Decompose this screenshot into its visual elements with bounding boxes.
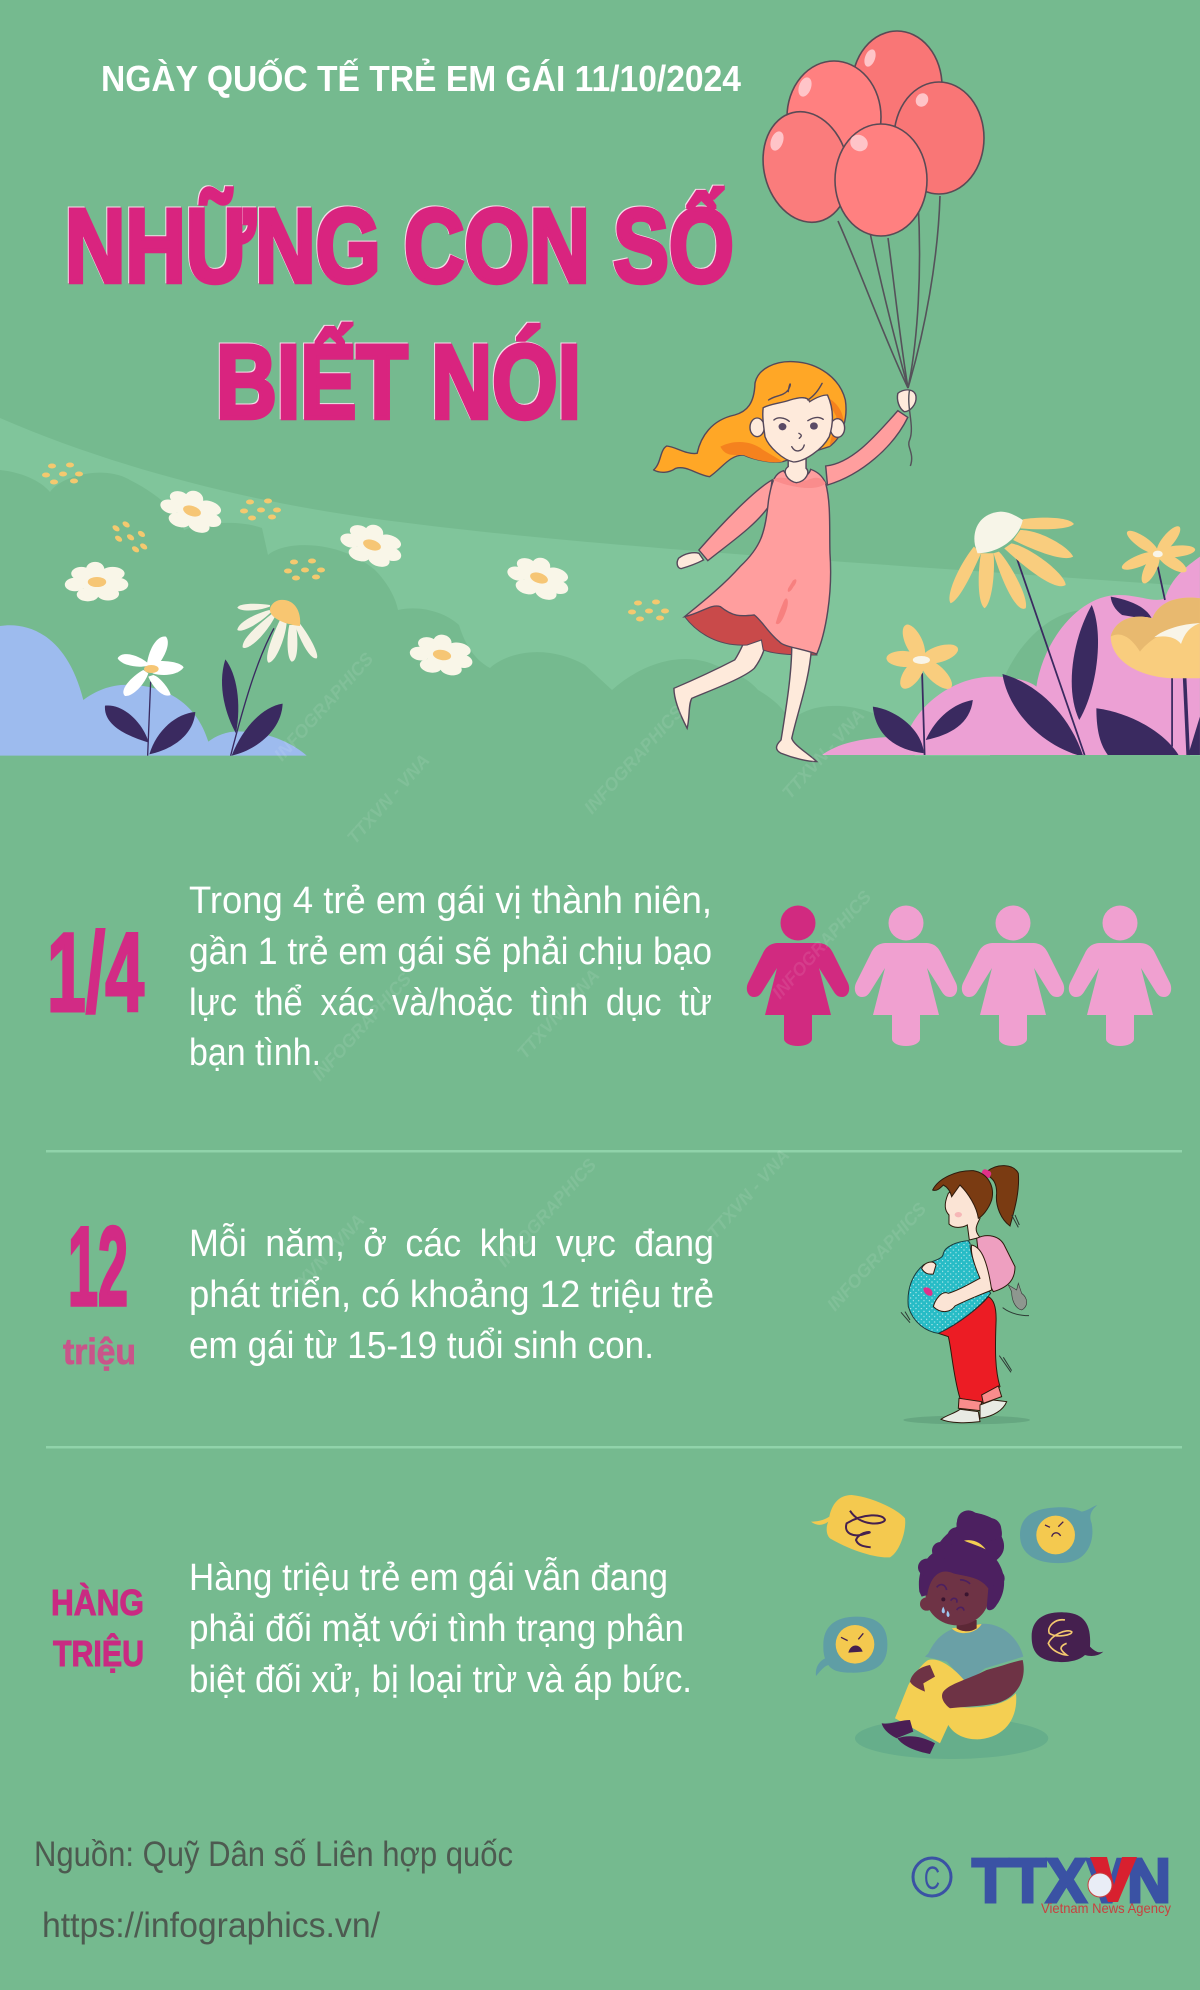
eyes and mouth xyxy=(774,417,823,451)
watermarks: INFOGRAPHICS xyxy=(580,702,687,818)
stat 2 text: phát triển, có khoảng 12 triệu trẻ xyxy=(189,1274,714,1316)
face xyxy=(763,395,832,462)
source: Nguồn: Quỹ Dân số Liên hợp quốc xyxy=(34,1835,513,1874)
sad girl illustration xyxy=(811,1495,1103,1759)
stat 1 text xyxy=(189,880,712,1074)
divider xyxy=(46,1446,1182,1448)
neck xyxy=(785,458,808,483)
front leg xyxy=(777,645,817,762)
pregnant girl illustration xyxy=(901,1166,1030,1424)
stat 3 text: phải đối mặt với tình trạng phân xyxy=(189,1608,684,1650)
daisies and dots xyxy=(42,462,669,679)
website: https://infographics.vn/ xyxy=(42,1906,380,1945)
title: BIẾT NÓI xyxy=(216,323,581,441)
right sleeve and hand xyxy=(826,411,908,485)
watermarks: TTXVN - VNA xyxy=(343,750,434,848)
logo: Vietnam News Agency xyxy=(1041,1900,1171,1916)
watermarks: INFOGRAPHICS xyxy=(493,1155,600,1271)
girl with balloons xyxy=(654,362,916,762)
dress body xyxy=(685,469,831,654)
stat 1 text: Trong 4 trẻ em gái vị thành niên, xyxy=(189,880,712,922)
dress underside xyxy=(685,603,817,655)
stat 3 label: HÀNG xyxy=(51,1582,144,1623)
stat 2 text: em gái từ 15-19 tuổi sinh con. xyxy=(189,1325,654,1367)
logo: TTXVN xyxy=(972,1847,1171,1916)
watermarks xyxy=(270,649,930,1315)
watermarks: TTXVN - VNA xyxy=(703,1145,794,1243)
title xyxy=(65,187,734,441)
watermarks: INFOGRAPHICS xyxy=(768,887,875,1003)
stat 1 number: 1/4 xyxy=(47,910,144,1035)
stat 3 text xyxy=(189,1556,692,1701)
logo: C xyxy=(924,1860,940,1896)
text: 12 xyxy=(68,1204,128,1329)
hair xyxy=(654,362,846,477)
watermarks: INFOGRAPHICS xyxy=(308,969,415,1085)
pink plants xyxy=(822,512,1200,755)
divider xyxy=(46,1150,1182,1152)
stat 3 text: Hàng triệu trẻ em gái vẫn đang xyxy=(189,1556,668,1599)
stat 2 unit: triệu xyxy=(63,1331,136,1372)
stat 2 text: Mỗi năm, ở các khu vực đang xyxy=(189,1222,714,1265)
ears xyxy=(750,418,764,437)
stat 3 label: TRIỆU xyxy=(53,1632,144,1674)
landscape hills xyxy=(0,418,1200,756)
stat 3 label xyxy=(51,1582,144,1674)
title: NHỮNG CON SỐ xyxy=(65,187,734,305)
balloons xyxy=(752,31,984,388)
watermarks: TTXVN - VNA xyxy=(513,965,604,1063)
watermarks: TTXVN - VNA xyxy=(278,1210,369,1308)
blue bush with flowers xyxy=(0,600,317,756)
stat 2 text xyxy=(189,1222,714,1367)
stat 1 text: lực thể xác và/hoặc tình dục từ xyxy=(189,982,712,1024)
watermarks: INFOGRAPHICS xyxy=(270,649,377,765)
icon: four women, one highlighted xyxy=(747,906,1171,1046)
back leg xyxy=(674,617,767,728)
header line: NGÀY QUỐC TẾ TRẺ EM GÁI 11/10/2024 xyxy=(101,57,741,99)
watermarks: INFOGRAPHICS xyxy=(823,1199,930,1315)
stat 1 text: gần 1 trẻ em gái sẽ phải chịu bạo xyxy=(189,931,712,973)
fringe xyxy=(769,383,822,400)
left sleeve and hand xyxy=(677,553,704,569)
stat 3 text: biệt đối xử, bị loại trừ và áp bức. xyxy=(189,1659,692,1701)
watermarks: TTXVN - VNA xyxy=(778,705,869,803)
stat 1 text: bạn tình. xyxy=(189,1032,321,1074)
